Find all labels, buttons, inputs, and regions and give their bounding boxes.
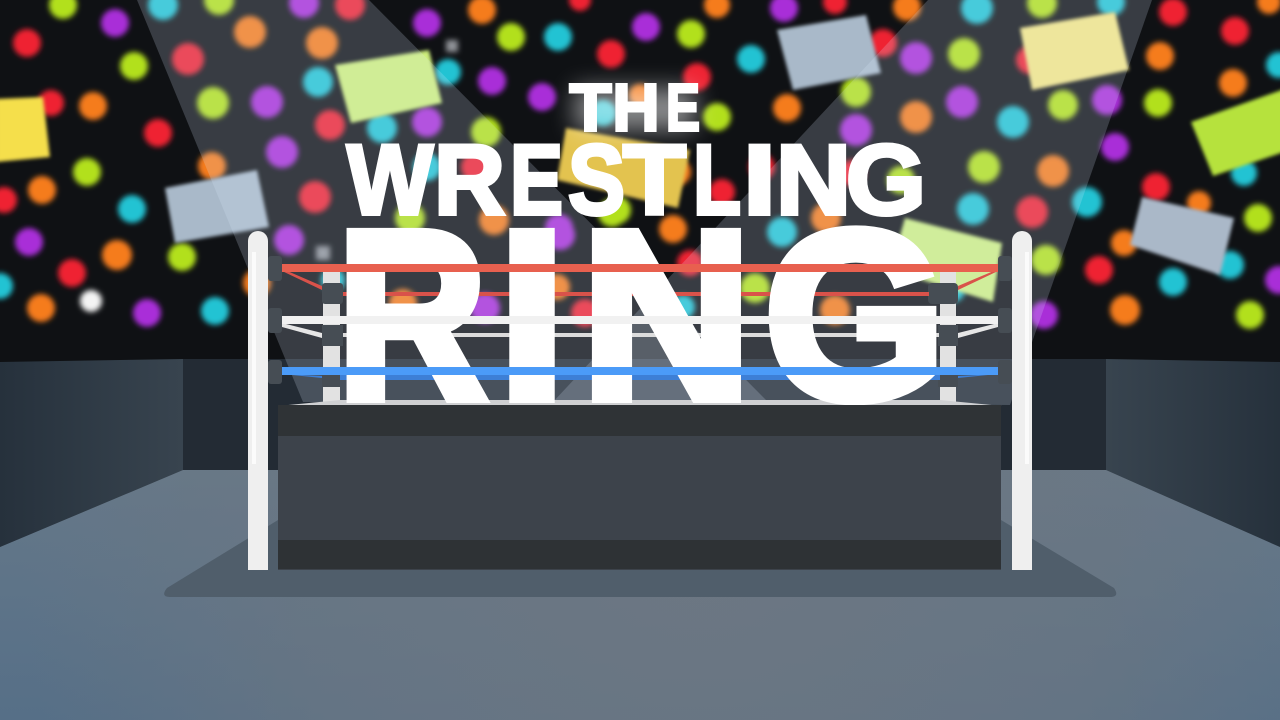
cyan crowd dots	[0, 0, 1280, 325]
title line: WRESTLING: N	[776, 124, 851, 235]
title line: RING: N	[581, 181, 752, 449]
spotlight: left beam	[137, 0, 768, 402]
title line: RING: R	[337, 181, 487, 449]
title line: WRESTLING: R	[434, 124, 505, 235]
small grey camera flashes	[316, 40, 458, 260]
sign: yellow left	[0, 97, 50, 162]
title line: WRESTLING: G	[846, 124, 926, 235]
fan signs: blurred rotated placards	[0, 12, 1280, 302]
sign: gold centre	[557, 128, 690, 208]
sign: lime right	[1191, 87, 1280, 176]
front middle rope: white	[282, 316, 998, 324]
title line: WRESTLING: E	[510, 124, 563, 235]
crowd lights: blurred coloured dots	[0, 0, 1280, 329]
title line: WRESTLING: I	[743, 124, 776, 235]
front right turnbuckle pads	[998, 256, 1012, 384]
title line: WRESTLING: S	[568, 124, 625, 235]
title glow	[575, 88, 695, 130]
ring apron	[278, 405, 1001, 570]
sign: grey right	[1130, 197, 1234, 275]
ring shadow on floor	[164, 520, 1116, 597]
front right ring post	[1012, 231, 1032, 570]
title line: WRESTLING: W	[347, 124, 434, 235]
front left ring post	[248, 231, 268, 570]
spotlight: right beam	[553, 0, 1152, 405]
sign: yellow top right	[1020, 12, 1129, 90]
title line: RING: I	[498, 181, 566, 449]
purple crowd dots	[15, 0, 1280, 329]
orange crowd dots	[27, 0, 1280, 325]
right wall	[1106, 359, 1280, 547]
ring canvas edge	[278, 400, 1002, 406]
red crowd dots	[0, 0, 1249, 327]
front bottom rope: blue	[282, 367, 998, 375]
title line: WRESTLING: T	[623, 124, 686, 235]
back turnbuckle pads	[322, 283, 958, 387]
back wall	[183, 359, 1106, 471]
sign: grey left	[165, 170, 269, 243]
back ring posts and pads	[322, 266, 958, 406]
back ropes and side ropes	[282, 270, 998, 380]
title line: WRESTLING: L	[693, 124, 741, 235]
lime crowd dots	[49, 0, 1272, 329]
sign: green top left	[335, 50, 442, 123]
front top rope: red	[282, 264, 998, 272]
title	[337, 70, 946, 449]
sign: grey top right	[777, 15, 881, 90]
front left turnbuckle pads	[268, 256, 282, 384]
left wall	[0, 359, 183, 547]
sign: green by ring	[890, 218, 1002, 302]
title line: THE: T	[570, 70, 612, 146]
title line: THE: H	[612, 70, 660, 146]
white sparkle dot	[80, 290, 102, 312]
title line: RING: G	[764, 181, 946, 449]
arena floor	[0, 470, 1280, 720]
crowd backdrop	[0, 0, 1280, 362]
title line: THE: E	[666, 70, 700, 146]
